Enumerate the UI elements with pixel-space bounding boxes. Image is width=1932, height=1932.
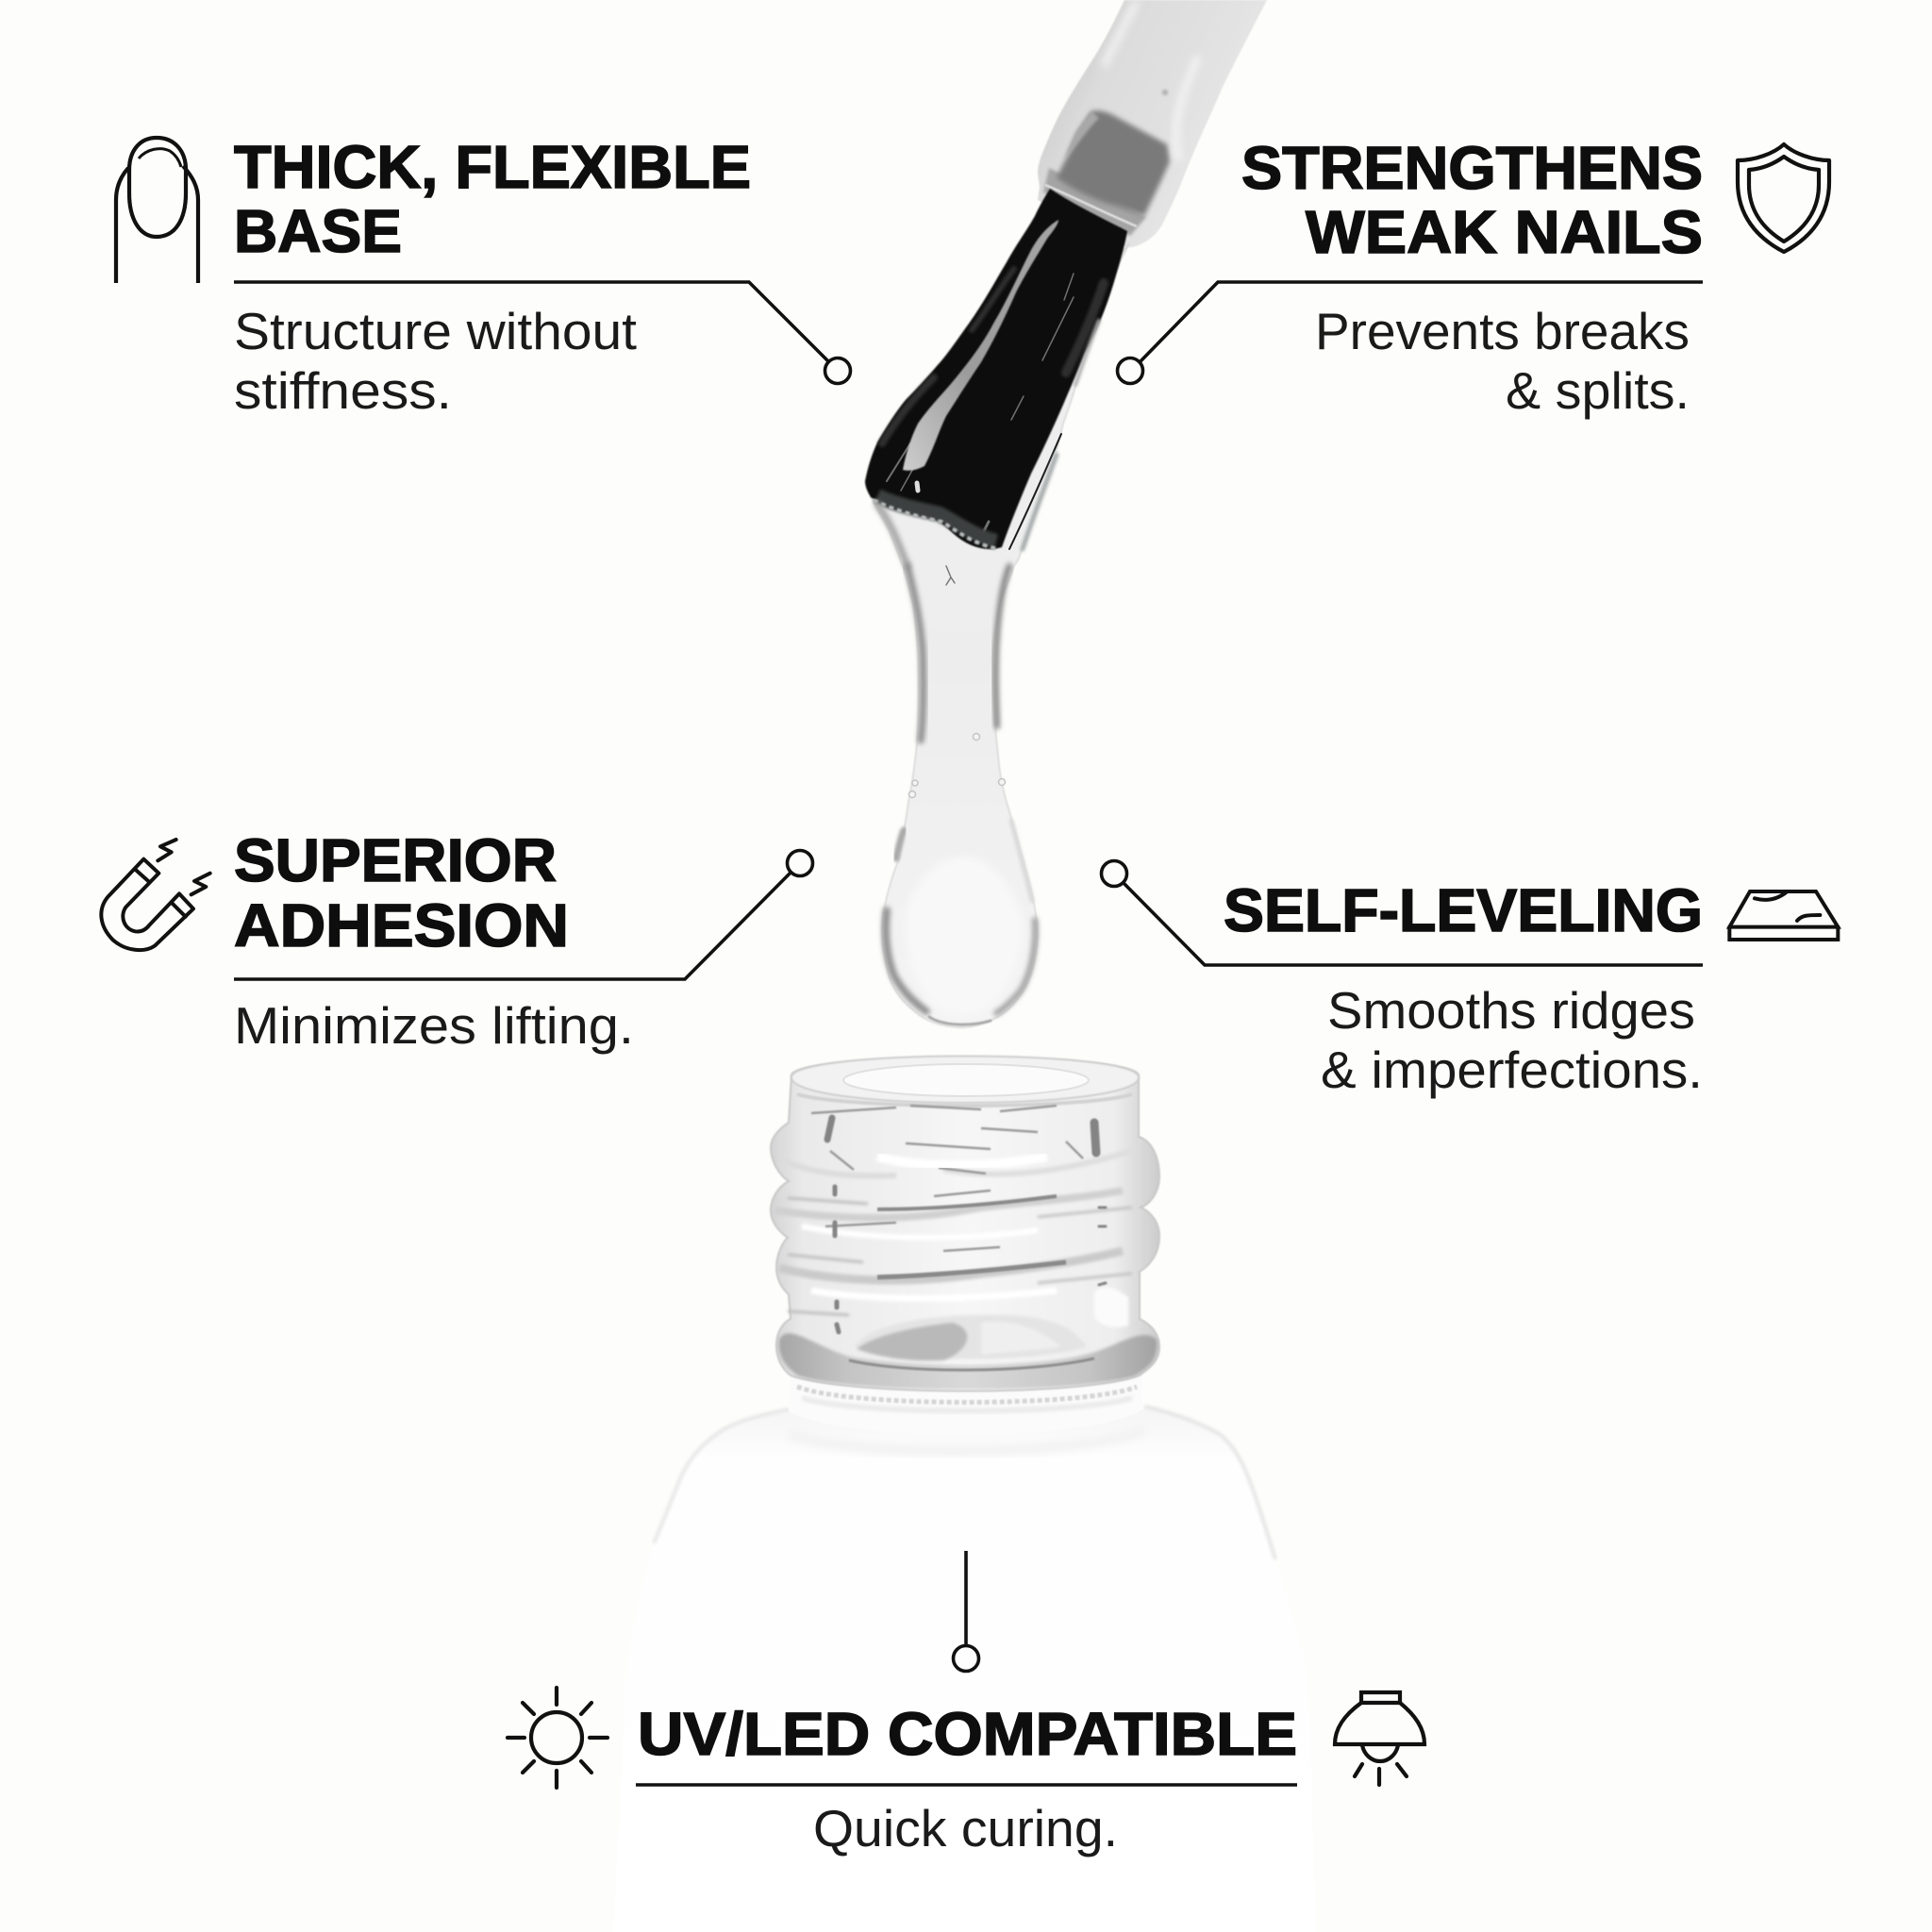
icon: magnet	[101, 840, 210, 950]
description: Smooths ridges	[1327, 981, 1695, 1040]
description: Minimizes lifting.	[234, 996, 634, 1055]
description: Quick curing.	[813, 1799, 1118, 1857]
bottle collar	[789, 1368, 1143, 1435]
heading: BASE	[234, 197, 402, 265]
heading	[234, 133, 751, 265]
frosted tip of bristles	[874, 496, 998, 549]
callout: thick, flexible base	[116, 133, 851, 420]
description	[1315, 302, 1690, 420]
heading	[1241, 134, 1703, 266]
small bubbles	[909, 734, 1006, 798]
callout: strengthens weak nails	[1117, 134, 1829, 420]
drop inner light	[906, 857, 1024, 1015]
lower ring	[779, 1333, 1157, 1390]
black bristles	[865, 189, 1127, 549]
description: stiffness.	[234, 361, 452, 420]
underline	[636, 1783, 1297, 1787]
callout: uv/led compatible	[508, 1551, 1424, 1857]
lower cap shadow	[1043, 168, 1146, 236]
brush	[865, 0, 1267, 1027]
glossy highlight	[903, 220, 1058, 471]
glass streaks	[811, 1106, 1083, 1251]
description: Prevents breaks	[1315, 302, 1690, 360]
bottle	[613, 1057, 1316, 1932]
heading: UV/LED COMPATIBLE	[638, 1700, 1297, 1768]
heading: THICK, FLEXIBLE	[234, 133, 751, 201]
icon: lamp	[1335, 1692, 1424, 1785]
leader line	[953, 1551, 979, 1672]
heading: ADHESION	[234, 891, 569, 959]
bottle body	[613, 1406, 1316, 1932]
description: & splits.	[1506, 361, 1690, 420]
thread bands	[775, 1151, 1132, 1315]
description	[1321, 981, 1703, 1099]
rim	[791, 1057, 1139, 1103]
leader line	[1117, 282, 1703, 383]
leader line	[234, 282, 851, 383]
callout: superior adhesion	[101, 826, 812, 1055]
icon: shield	[1738, 144, 1829, 252]
base window	[854, 1315, 1087, 1359]
gel edge accents	[877, 321, 1099, 1024]
callout: self-leveling	[1102, 860, 1838, 1099]
bristle texture	[882, 269, 1104, 533]
description	[234, 302, 637, 420]
translucent cap	[1038, 0, 1267, 247]
heading	[234, 826, 569, 959]
icon: nail	[116, 138, 198, 283]
description: Structure without	[234, 302, 637, 360]
inner dark ferrule	[1057, 110, 1170, 216]
gel around bristles	[871, 243, 1129, 1027]
heading: STRENGTHENS	[1241, 134, 1703, 202]
leader line	[234, 851, 813, 979]
heading: WEAK NAILS	[1306, 198, 1703, 266]
glass neck	[771, 1057, 1159, 1391]
icon: leveled surface	[1729, 891, 1838, 940]
description: & imperfections.	[1321, 1041, 1703, 1099]
leader line	[1102, 860, 1703, 965]
heading: SUPERIOR	[234, 826, 557, 894]
heading: SELF-LEVELING	[1224, 876, 1703, 944]
icon: sun	[508, 1688, 608, 1788]
